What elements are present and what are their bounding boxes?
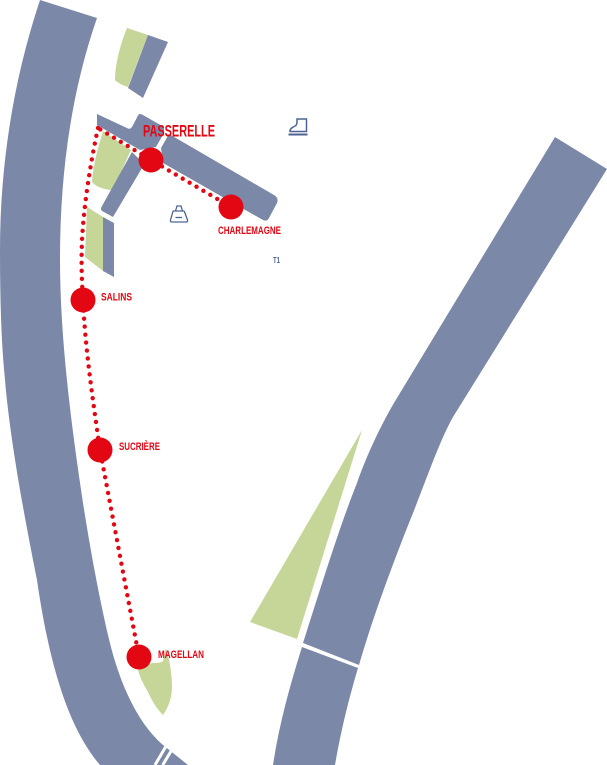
label: Sucrière: SUCRIÈRE bbox=[119, 440, 160, 453]
stop: Magellan bbox=[126, 644, 152, 670]
dotted route bbox=[82, 128, 231, 657]
label: Magellan: MAGELLAN bbox=[158, 649, 204, 661]
stop: Charlemagne bbox=[218, 194, 244, 220]
park: triangle bbox=[250, 430, 362, 639]
label: Charlemagne: CHARLEMAGNE bbox=[218, 225, 281, 237]
park: Magellan bbox=[138, 648, 172, 715]
right river upper section bbox=[303, 137, 607, 665]
label: T1: T1 bbox=[273, 255, 280, 265]
label: Passerelle: PASSERELLE bbox=[143, 122, 215, 140]
icon: shopping bag bbox=[170, 206, 188, 222]
stop: Salins bbox=[70, 288, 96, 312]
icon: skate bbox=[288, 119, 308, 134]
stop: Passerelle bbox=[138, 148, 164, 172]
right river lower section bbox=[273, 647, 358, 765]
lower block bbox=[85, 207, 114, 277]
stop: Sucrière bbox=[88, 438, 112, 462]
label: Salins: SALINS bbox=[101, 292, 132, 304]
left river bbox=[0, 0, 188, 765]
top block bbox=[115, 28, 168, 98]
central block bbox=[92, 114, 278, 221]
